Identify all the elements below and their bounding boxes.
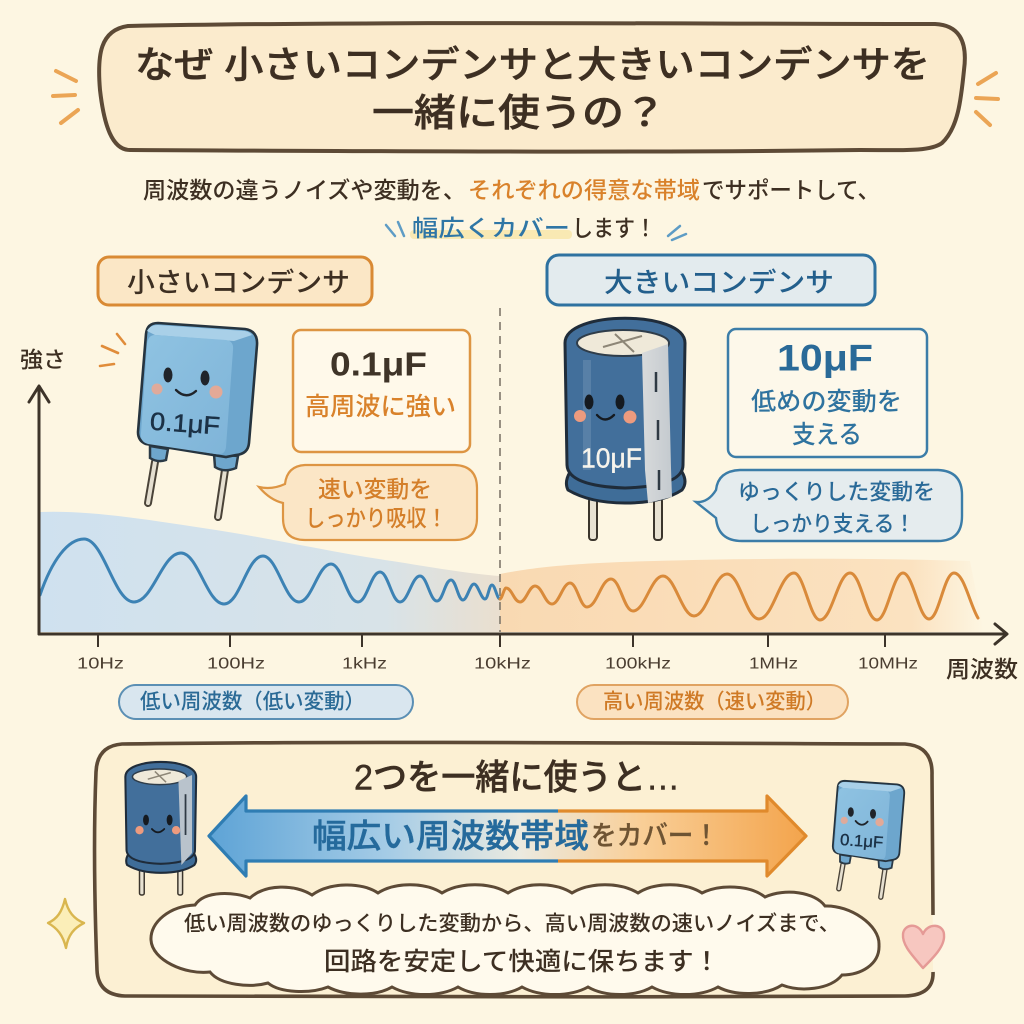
divider dashed line — [499, 308, 501, 632]
info box: 10uF: 低めの変動を — [751, 388, 902, 416]
title accent marks right — [976, 73, 998, 125]
speech bubble: small capacitor — [259, 465, 477, 540]
info box: 0.1uF — [293, 330, 470, 452]
icon: mini large capacitor — [125, 762, 196, 895]
speech bubble: large capacitor: ゆっくりした変動を — [738, 480, 935, 504]
y axis: 強さ — [20, 348, 66, 372]
speech bubble: small capacitor: しっかり吸収！ — [305, 505, 447, 531]
x axis — [39, 624, 1007, 647]
label: 0.1μF — [149, 408, 221, 440]
intro accent marks — [386, 222, 686, 240]
y axis — [20, 348, 66, 634]
info box: 0.1uF: 0.1μF — [330, 346, 427, 382]
icon: sparkle — [48, 899, 84, 948]
title text — [135, 44, 930, 135]
heading: large capacitor: 大きいコンデンサ — [604, 268, 834, 298]
icon: small capacitor — [138, 323, 257, 517]
face — [164, 368, 172, 382]
icon: mini small capacitor: 0.1μF — [839, 831, 884, 852]
pill: high frequency — [577, 685, 848, 719]
intro text — [143, 177, 880, 241]
double arrow: をカバー！ — [591, 821, 719, 851]
x axis labels: 100Hz — [207, 656, 265, 672]
x axis labels: 10MHz — [858, 656, 918, 672]
x axis labels: 10kHz — [474, 656, 531, 672]
intro text: それぞれの得意な帯域 — [468, 177, 700, 203]
double arrow: 幅広い周波数帯域 — [312, 818, 589, 854]
info box: 10uF: 10μF — [777, 338, 873, 378]
intro text: します！ — [572, 215, 656, 241]
title text: なぜ 小さいコンデンサと大きいコンデンサを — [135, 44, 930, 86]
panel: bottom summary — [95, 742, 933, 997]
x axis labels: 1MHz — [749, 656, 798, 672]
icon: mini small capacitor — [833, 781, 904, 897]
intro text: 周波数の違うノイズや変動を、 — [143, 177, 466, 203]
double arrow — [209, 796, 806, 876]
title text: 一緒に使うの？ — [372, 93, 666, 135]
chart area fills — [40, 512, 984, 632]
cloud callout: 低い周波数のゆっくりした変動から、高い周波数の速いノイズまで、 — [184, 912, 840, 936]
cloud callout — [151, 885, 879, 994]
x axis labels: 周波数 — [946, 656, 1018, 682]
x axis labels: 100kHz — [605, 656, 671, 672]
x axis labels — [77, 656, 1018, 682]
info box: 10uF: 支える — [792, 421, 862, 449]
label: 10μF — [581, 442, 642, 474]
accent marks near small capacitor — [100, 334, 125, 366]
speech bubble: large capacitor — [696, 470, 962, 541]
icon: large capacitor — [565, 318, 685, 540]
pill: high frequency: 高い周波数（速い変動） — [603, 690, 826, 714]
speech bubble: small capacitor: 速い変動を — [318, 476, 432, 502]
pill: low frequency: 低い周波数（低い変動） — [140, 690, 365, 714]
info box: 10uF — [728, 329, 927, 457]
x axis labels: 10Hz — [77, 656, 124, 672]
heading: small capacitor: 小さいコンデンサ — [127, 268, 350, 298]
speech bubble: large capacitor: しっかり支える！ — [750, 512, 915, 536]
title accent marks left — [53, 71, 78, 123]
pill: low frequency — [119, 685, 413, 719]
heading: 2つを一緒に使うと… — [354, 758, 680, 798]
info box: 0.1uF: 高周波に強い — [305, 393, 456, 421]
intro text: 幅広くカバー — [412, 215, 570, 241]
blue wave — [40, 539, 500, 604]
x axis labels: 1kHz — [342, 656, 387, 672]
icon: heart — [903, 926, 944, 968]
heading: small capacitor — [98, 257, 372, 305]
heading: large capacitor — [547, 255, 875, 305]
face — [584, 394, 594, 410]
orange wave — [500, 573, 978, 620]
intro text: でサポートして、 — [702, 177, 880, 203]
cloud callout: 回路を安定して快適に保ちます！ — [324, 948, 720, 976]
title panel — [99, 23, 965, 152]
